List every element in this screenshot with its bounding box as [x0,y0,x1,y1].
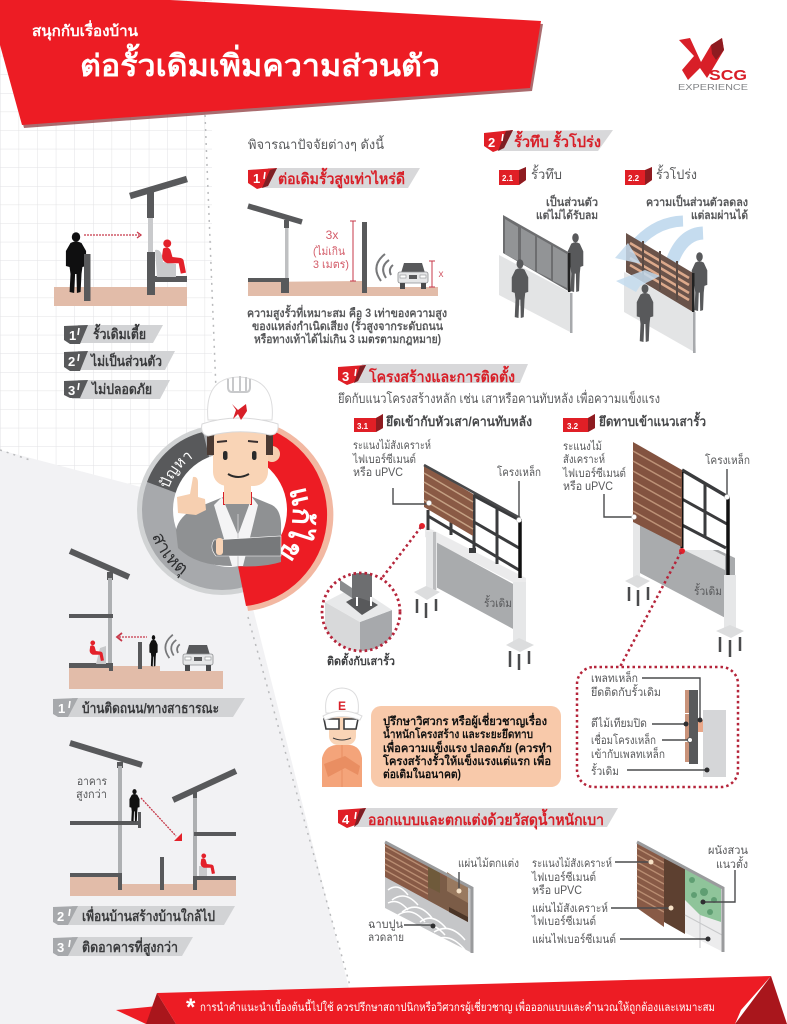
tag: ไม่เป็นส่วนตัว: ไม่เป็นส่วนตัว [89,352,162,369]
wall decoration right [531,842,748,952]
fence diagram 3.2 [562,440,750,667]
labels: รั้วเดิม [591,763,619,778]
heading 2.1: 2.1 [502,174,514,183]
tag: เพื่อนบ้าน: เพื่อนบ้านสร้างบ้านใกล้ไป [82,906,215,924]
label: synthetic wood sheet: แผ่นไม้สังเคราะห์ [532,901,608,915]
heading 3.2 [563,411,706,432]
section 3 lead: ยึดกับแนวโครงสร้างหลัก เช่น เสาหรือคานทับหลัง เพื่อความแข็งแรง [338,389,660,406]
cause 2 diagram: taller neighbouring building [70,743,236,896]
problem house diagram [54,179,187,306]
text: solid fence: แต่ไม่ได้รับลม [536,208,598,222]
heading 3: โครงสร้างและการติดตั้ง [368,365,515,386]
character [176,376,281,566]
wood panel [633,442,682,547]
label: patterned plaster [368,919,436,944]
engineer callout: เพื่อความแข็งแรง ปลอดภัย (ควรทำ [383,739,552,755]
logo: SCG experience: EXPERIENCE [678,83,748,92]
label: old fence: รั้วเดิม [484,595,512,610]
label: material: ไฟเบอร์ซีเมนต์ [352,452,416,466]
labels [591,670,665,778]
label: vertical garden: แนวตั้ง [716,856,748,871]
header banner [0,0,543,128]
tag: ไม่เป็นส่วนตัว [64,351,175,371]
tag: ไม่ปลอดภัย: ไม่ปลอดภัย [90,380,152,397]
detail drawing [685,690,726,777]
old wall [625,512,744,657]
tag: รั้วเดิมเตี้ย [64,323,163,344]
heading 3.2: ยึดทาบเข้าแนวเสารั้ว [599,411,706,429]
engineer callout: น้ำหนักโครงสร้าง และระยะยึดทาบ [383,725,533,741]
label: decorative wood sheet: แผ่นไม้ตกแต่ง [458,857,519,870]
heading 3.2: 3.2 [567,422,579,431]
heading 2: 2 [488,135,495,150]
label: material: หรือ uPVC [353,466,403,479]
engineer callout: ปรึกษาวิศวกร หรือผู้เชี่ยวชาญเรื่อง [383,712,547,729]
ring: solution [230,423,333,611]
wood panel [424,465,520,536]
labels: เข้ากับเพลทเหล็ก [591,746,665,761]
subtitle: สนุกกับเรื่องบ้าน [32,20,139,41]
fence diagram 3.1 [352,438,541,670]
section 1 description: ความสูงรั้วที่เหมาะสม คือ 3 เท่าของความสูง [247,304,447,321]
label: taller building: สูงกว่า [76,789,107,801]
label: problem: ปัญหา [158,452,192,487]
label: taller building [76,776,107,801]
label: vertical garden: ผนังสวน [708,845,748,857]
old wall [414,526,534,670]
section 1 description: ของแหล่งกำเนิดเสียง (รั้วสูงจากระดับถนน [252,317,443,334]
label: material [352,438,432,506]
label: synthetic wood sheet: ไฟเบอร์ซีเมนต์ [531,914,596,928]
footnote: * [186,994,196,1021]
label: fibre cement sheet [532,932,710,946]
tag: อาคารสูงกว่า: 3 [57,940,64,955]
heading 2.2: รั้วโปร่ง [656,164,697,182]
tag: ไม่ปลอดภัย [64,380,170,399]
tag: อาคารสูงกว่า [53,937,193,956]
label: material: หรือ uPVC [563,480,613,493]
tag: บ้านติดถนน: 1 [58,701,65,716]
heading 2.1: รั้วทึบ [531,164,562,182]
intro line: พิจารณาปัจจัยต่างๆ ดังนี้ [248,135,385,152]
fence height diagram [248,206,444,296]
heading 2: รั้วทึบ รั้วโปร่ง [514,130,601,151]
section 1 description: หรือทางเท้าได้ไม่เกิน 3 เมตรตามกฎหมาย) [254,332,441,346]
logo: SCG experience: SCG [709,67,747,84]
label: steel frame [705,452,750,500]
tag: รั้วเดิมเตี้ย: รั้วเดิมเตี้ย [93,323,146,342]
text: solid fence: เป็นส่วนตัว [546,194,598,209]
label: material: ระแนงไม้สังเคราะห์ [353,438,431,452]
text: open fence [646,194,748,222]
logo: SCG experience [678,38,748,92]
heading 3.1: ยึดเข้ากับหัวเสา/คานทับหลัง [386,414,532,429]
engineer callout [371,706,561,787]
wind arrows back [630,221,703,268]
heading 1: 1 [253,171,260,186]
label: patterned plaster: ฉาบปูน [368,919,403,931]
label: slats: ไฟเบอร์ซีเมนต์ [531,870,596,884]
label: slats: หรือ uPVC [532,884,582,897]
dimension label [313,228,349,271]
heading 3.1: 3.1 [357,422,369,431]
label: material: สังเคราะห์ [563,452,605,466]
tag: อาคารสูงกว่า: ติดอาคารที่สูงกว่า [82,937,178,956]
label: steel frame [497,464,541,522]
heading 1 [248,167,420,189]
text: open fence: ความเป็นส่วนตัวลดลง [646,194,748,209]
label: steel frame: โครงเหล็ก [497,464,541,479]
fence height diagram: x [438,269,444,280]
engineer icon: E [338,699,346,713]
tag: ไม่ปลอดภัย: 3 [68,383,75,398]
label: cause: สาเหตุ [152,534,186,578]
label: material: ระแนงไม้ [563,440,602,453]
ring: problem and cause [137,425,307,595]
label: slats [531,856,654,897]
labels: เพลทเหล็ก [591,670,638,685]
label: taller building: อาคาร [77,776,107,788]
heading 4: ออกแบบและตกแต่งด้วยวัสดุน้ำหนักเบา [368,808,604,830]
detail box: plate connection [577,667,738,787]
heading 3.1 [354,414,532,432]
text: solid fence [536,194,598,222]
dimension label: (ไม่เกิน [313,245,345,258]
solid fence illustration [499,215,583,333]
heading 1: ต่อเดิมรั้วสูงเท่าไหร่ดี [278,167,405,189]
tag: ไม่เป็นส่วนตัว: 2 [68,354,75,369]
heading 2.2: 2.2 [628,174,640,183]
labels: ตีไม้เทียมปิด [591,717,647,730]
label: solution: แก้ไข [281,488,317,562]
car [398,263,428,289]
engineer callout: ต่อเติมในอนาคต) [383,767,461,781]
label: steel frame: โครงเหล็ก [705,452,750,467]
dimension label: 3x [326,228,338,242]
tag: บ้านติดถนน: บ้านติดถนน/ทางสาธารณะ [82,700,219,716]
heading 2.2 [625,164,697,185]
circular badge with character [137,376,334,611]
label: material: ไฟเบอร์ซีเมนต์ [562,466,626,480]
open fence illustration [615,221,707,353]
steel frame [682,470,728,575]
wall decoration left [368,842,519,953]
section 1 description [247,304,447,346]
tag: เพื่อนบ้าน: 2 [57,909,64,924]
main title: ต่อรั้วเดิมเพิ่มความส่วนตัว [80,43,440,83]
dimension label: 3 เมตร) [313,259,349,271]
tag: รั้วเดิมเตี้ย: 1 [69,328,76,343]
cause 1 diagram: house beside road [69,551,223,689]
label: material [562,440,636,520]
label: fibre cement sheet: แผ่นไฟเบอร์ซีเมนต์ [532,932,616,946]
footer ribbon [116,976,787,1024]
heading 4: 4 [342,812,350,827]
noise waves [376,254,393,281]
label: decorative wood sheet [456,857,519,894]
label: synthetic wood sheet [531,901,674,928]
heading 2 [484,130,613,152]
heading 2.1 [499,164,562,185]
engineer icon [322,688,362,787]
heading 3 [338,364,528,386]
label: slats: ระแนงไม้สังเคราะห์ [532,856,612,870]
label: vertical garden [700,845,748,904]
steel frame [428,495,520,578]
engineer callout: โครงสร้างรั้วให้แข็งแรงแต่แรก เพื่อ [382,752,551,768]
wind arrowheads [615,243,660,292]
label: old fence: รั้วเดิม [694,583,722,598]
heading 4 [338,808,618,830]
labels: เชื่อมโครงเหล็ก [591,732,656,747]
caption: ติดตั้งกับเสารั้ว [327,652,395,668]
labels: ยึดติดกับรั้วเดิม [591,684,661,699]
heading 3: 3 [342,369,349,384]
detail circle: post mounting [322,572,400,668]
label: patterned plaster: ลวดลาย [368,932,404,944]
text: open fence: แต่ลมผ่านได้ [691,208,748,222]
